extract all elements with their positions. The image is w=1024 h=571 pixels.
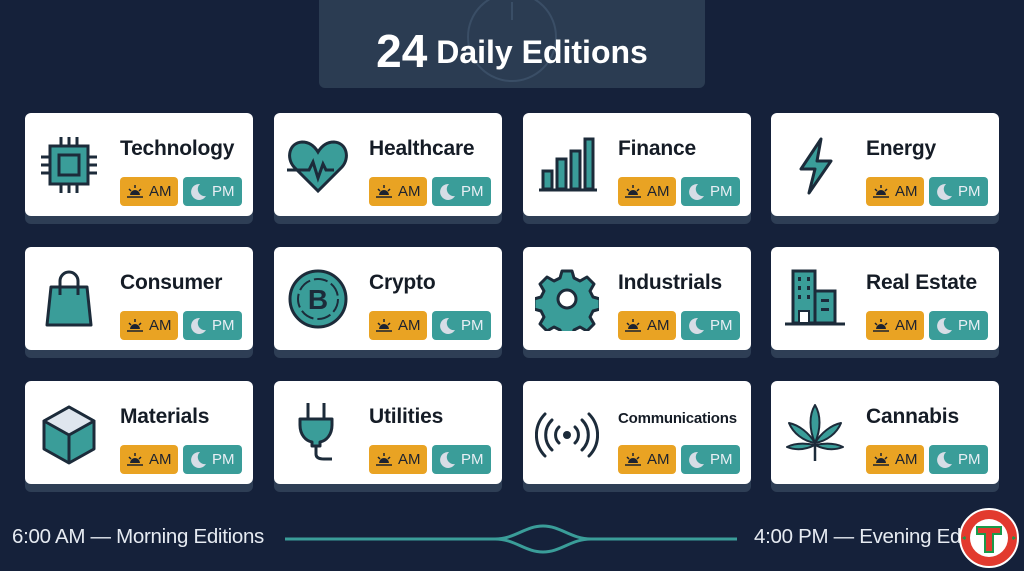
card: Communications: PM <box>710 451 732 468</box>
card: Energy <box>771 113 999 216</box>
icon: broadcast signal <box>535 412 599 458</box>
card: Industrials: AM <box>647 317 670 334</box>
card: Industrials: PM <box>710 317 732 334</box>
card: Finance: PM <box>710 183 732 200</box>
icon: chip <box>41 137 97 193</box>
icon: shopping bag <box>46 270 92 326</box>
card: Healthcare <box>274 113 502 216</box>
logo badge <box>959 508 1019 568</box>
title panel <box>319 0 705 88</box>
card: Cannabis: Cannabis <box>866 405 959 428</box>
card: Energy: AM <box>895 183 918 200</box>
card: Utilities: Utilities <box>369 405 443 428</box>
card: Finance <box>523 113 751 216</box>
title panel: 24 Daily Editions <box>376 25 648 77</box>
icon: bitcoin coin <box>288 270 348 328</box>
card: Real Estate: AM <box>895 317 918 334</box>
card: Materials: AM <box>149 451 172 468</box>
icon: leaf <box>786 404 844 461</box>
card: Cannabis: AM <box>895 451 918 468</box>
card: Communications <box>523 381 751 484</box>
card: Technology: Technology <box>120 137 234 160</box>
card: Energy: Energy <box>866 137 936 160</box>
card: Communications: Communications <box>618 410 737 427</box>
footer: evening label: 4:00 PM — Evening Edit <box>754 525 971 548</box>
card: Healthcare: Healthcare <box>369 137 474 160</box>
card: Communications: AM <box>647 451 670 468</box>
card: Technology: PM <box>212 183 234 200</box>
card: Technology: AM <box>149 183 172 200</box>
card: Cannabis: PM <box>958 451 980 468</box>
card: Real Estate <box>771 247 999 350</box>
card: Materials: Materials <box>120 405 209 428</box>
icon: bar chart <box>539 138 597 192</box>
icon: plug <box>298 403 334 460</box>
icon: lightning <box>799 138 833 194</box>
card: Crypto: Crypto <box>369 271 435 294</box>
card: Consumer: AM <box>149 317 172 334</box>
card: Technology <box>25 113 253 216</box>
card: Finance: AM <box>647 183 670 200</box>
card: Materials <box>25 381 253 484</box>
card: Consumer: PM <box>212 317 234 334</box>
card: Utilities: AM <box>398 451 420 468</box>
card: Utilities <box>274 381 502 484</box>
footer: timeline wave <box>285 524 737 554</box>
icon: buildings <box>785 270 845 326</box>
card: Crypto: PM <box>461 317 484 334</box>
card: Healthcare: AM <box>398 183 420 200</box>
card: Real Estate: PM <box>958 317 980 334</box>
icon: bitcoin coin: B <box>308 284 328 315</box>
card: Real Estate: Real Estate <box>866 271 977 294</box>
card: Crypto: AM <box>398 317 420 334</box>
icon: gear <box>535 270 599 331</box>
card: Materials: PM <box>212 451 234 468</box>
footer: morning label: 6:00 AM — Morning Editions <box>12 525 264 548</box>
card: Industrials <box>523 247 751 350</box>
card: Cannabis <box>771 381 999 484</box>
icon: heart <box>287 140 348 193</box>
card: Consumer <box>25 247 253 350</box>
icon: cube <box>42 406 96 464</box>
card: Energy: PM <box>958 183 980 200</box>
card: Finance: Finance <box>618 137 696 160</box>
card: Healthcare: PM <box>461 183 484 200</box>
card: Consumer: Consumer <box>120 271 222 294</box>
card: Crypto <box>274 247 502 350</box>
card: Utilities: PM <box>461 451 484 468</box>
card: Industrials: Industrials <box>618 271 722 294</box>
